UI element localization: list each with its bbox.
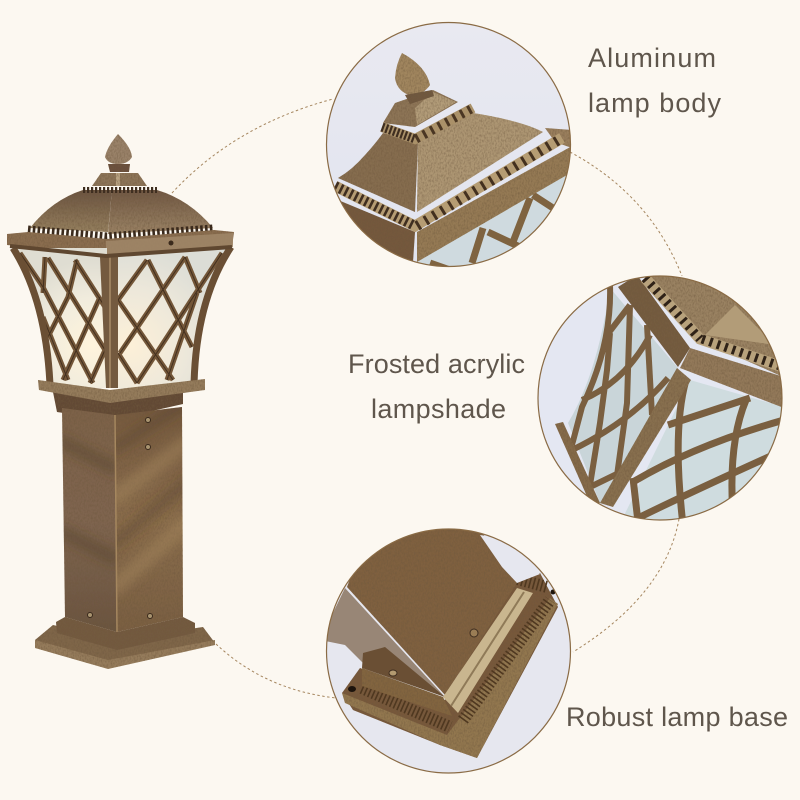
plate holes — [348, 686, 356, 692]
label: aluminum lamp body: Aluminum — [588, 43, 716, 73]
side frame — [555, 422, 600, 503]
lamp shade — [10, 246, 232, 388]
lamp post — [62, 407, 183, 632]
plate — [342, 573, 558, 758]
gold trim — [443, 588, 533, 713]
label: aluminum lamp body — [588, 43, 722, 118]
label: frosted acrylic lampshade: lampshade — [371, 394, 506, 424]
label: frosted acrylic lampshade — [348, 349, 525, 424]
roof — [338, 112, 543, 212]
cap and back bead — [383, 90, 458, 127]
lamp base — [35, 617, 215, 669]
zigzag trim — [362, 577, 550, 727]
glass and lattice — [418, 176, 566, 266]
front bead trim — [335, 138, 562, 226]
lamp shade frame — [13, 248, 50, 385]
label: aluminum lamp body: lamp body — [588, 88, 722, 118]
front lattice — [633, 380, 784, 525]
rim — [330, 128, 572, 262]
circle 1: aluminum lamp body detail — [326, 22, 572, 270]
side lattice — [572, 285, 668, 490]
circle 2: frosted acrylic detail — [538, 270, 790, 530]
post front face — [347, 525, 517, 695]
lamp finial — [92, 134, 147, 186]
label: frosted acrylic lampshade: Frosted acrylic — [348, 349, 525, 379]
front glass — [625, 380, 781, 520]
dashed connector lines — [172, 99, 682, 698]
corner post — [600, 368, 691, 507]
side glass — [568, 288, 678, 503]
circle 3: lamp base detail — [320, 525, 570, 773]
roof — [652, 276, 780, 376]
step — [362, 668, 452, 716]
post left reflective face — [320, 588, 445, 697]
finial — [395, 53, 434, 104]
bead — [645, 278, 780, 366]
lamp collar — [38, 379, 205, 420]
rim — [618, 275, 784, 408]
lamp: full product photo — [7, 134, 234, 669]
label: robust lamp base: Robust lamp base — [566, 702, 788, 732]
screws — [470, 629, 478, 637]
lamp roof — [7, 190, 234, 255]
lamp shade lattice — [20, 253, 222, 383]
